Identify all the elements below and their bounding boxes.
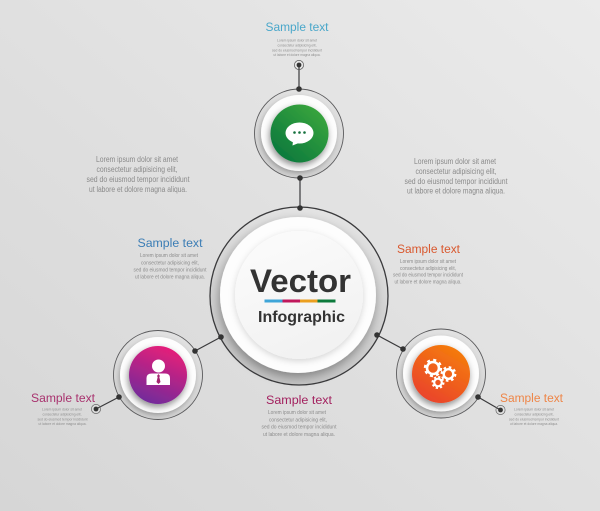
inner disc xyxy=(235,231,363,359)
subtitle: Infographic: Infographic xyxy=(258,309,345,326)
connector: right circle to end node xyxy=(475,394,505,415)
body: sed do eiusmod tempor incididunt xyxy=(38,416,88,421)
body: consectetur adipisicing elit, xyxy=(141,260,199,266)
connector: left circle to centre circle xyxy=(192,334,224,354)
body: ut labore et dolore magna aliqua. xyxy=(394,280,462,286)
body: ut labore et dolore magna aliqua. xyxy=(274,52,320,57)
heading: Sample text xyxy=(500,391,564,405)
orange disc xyxy=(412,345,470,403)
heading: Sample text xyxy=(266,20,329,34)
text block: upper left paragraph: Lorem ipsum dolor sit amet xyxy=(96,155,179,164)
panel: top circle xyxy=(254,89,344,178)
text block: upper left paragraph xyxy=(86,155,190,194)
title: Vector: Vector xyxy=(250,263,351,299)
body: consectetur adipisicing elit, xyxy=(514,411,554,416)
body: sed do eiusmod tempor incididunt xyxy=(272,47,323,52)
ring xyxy=(254,89,344,178)
text block: upper right paragraph: sed do eiusmod tempor incididunt xyxy=(404,177,508,186)
body xyxy=(134,253,207,280)
text block: red-orange label xyxy=(393,242,463,286)
ring xyxy=(114,330,202,420)
purple disc xyxy=(129,346,187,404)
body: sed do eiusmod tempor incididunt xyxy=(509,416,560,421)
text block: upper right paragraph: ut labore et dolore magna aliqua. xyxy=(407,186,505,196)
white disc xyxy=(120,337,196,413)
text block: right label xyxy=(500,391,564,426)
body xyxy=(509,406,560,426)
body xyxy=(393,259,463,286)
white disc xyxy=(261,95,337,171)
icon: gears xyxy=(425,360,455,388)
heading: Sample text xyxy=(266,393,333,407)
body: sed do eiusmod tempor incididunt xyxy=(134,268,207,274)
body: Lorem ipsum dolor sit amet xyxy=(277,38,318,43)
body: consectetur adipisicing elit, xyxy=(400,266,456,272)
white disc xyxy=(403,336,479,412)
body xyxy=(38,406,88,426)
icon: businessman xyxy=(146,360,170,385)
panel: left circle xyxy=(114,330,202,420)
body xyxy=(262,410,337,438)
panel: centre circle xyxy=(210,207,388,385)
heading: Sample text xyxy=(397,242,461,256)
text block: upper right paragraph xyxy=(404,157,508,196)
green disc xyxy=(270,104,328,162)
body: sed do eiusmod tempor incididunt xyxy=(393,272,463,278)
panel: right circle xyxy=(396,329,486,418)
body: consectetur adipisicing elit, xyxy=(278,42,316,47)
text block: upper right paragraph: Lorem ipsum dolor sit amet xyxy=(414,157,497,166)
white disc xyxy=(220,217,376,373)
text block: top label xyxy=(266,20,329,57)
text block: left label xyxy=(31,391,96,426)
colour bar xyxy=(264,300,336,302)
icon: speech bubble xyxy=(286,122,314,146)
connector: top circle to centre circle xyxy=(297,175,303,211)
body: Lorem ipsum dolor sit amet xyxy=(140,253,198,259)
text block: bottom label xyxy=(262,393,337,438)
body: sed do eiusmod tempor incididunt xyxy=(262,424,337,430)
connector: left circle to end node xyxy=(91,394,122,414)
body: consectetur adipisicing elit, xyxy=(269,418,327,424)
body: Lorem ipsum dolor sit amet xyxy=(400,259,456,265)
heading: Sample text xyxy=(31,391,96,405)
ring xyxy=(396,329,486,418)
body: ut labore et dolore magna aliqua. xyxy=(263,432,335,438)
text block: upper left paragraph: ut labore et dolore magna aliqua. xyxy=(89,185,187,194)
body: Lorem ipsum dolor sit amet xyxy=(42,406,83,411)
body: Lorem ipsum dolor sit amet xyxy=(268,410,326,416)
body: ut labore et dolore magna aliqua. xyxy=(510,421,558,426)
text block: upper left paragraph: consectetur adipisicing elit, xyxy=(96,165,178,174)
heading: Sample text xyxy=(138,236,203,250)
text block: upper left paragraph: sed do eiusmod tempor incididunt xyxy=(86,175,190,184)
connector: right circle to centre circle xyxy=(374,332,406,352)
body: consectetur adipisicing elit, xyxy=(42,411,82,416)
body: ut labore et dolore magna aliqua. xyxy=(135,274,205,280)
text block: blue label xyxy=(134,236,207,280)
outer ring xyxy=(210,207,388,385)
body: ut labore et dolore magna aliqua. xyxy=(38,421,86,426)
connector: top circle to end node xyxy=(294,60,304,92)
body xyxy=(272,38,323,57)
text block: upper right paragraph: consectetur adipisicing elit, xyxy=(416,167,496,176)
body: Lorem ipsum dolor sit amet xyxy=(514,406,555,411)
